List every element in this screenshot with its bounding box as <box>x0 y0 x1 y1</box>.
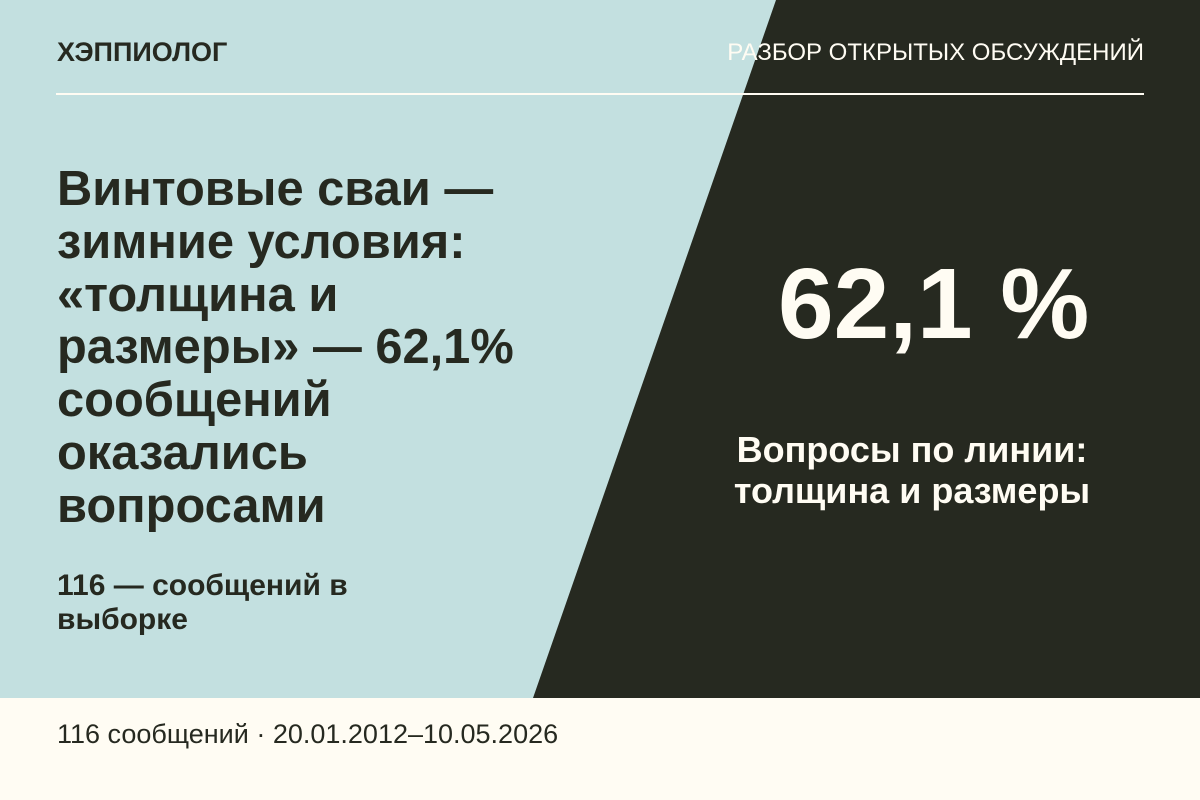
heading: зимние условия: <box>57 215 465 269</box>
heading <box>57 162 514 533</box>
stat caption: Вопросы по линии: <box>737 429 1087 470</box>
heading: размеры» — 62,1% <box>57 320 514 374</box>
big stat: 62,1 % <box>778 248 1089 360</box>
sample size note: 116 — сообщений в <box>57 569 348 602</box>
stat caption <box>734 429 1090 511</box>
sample size note: выборке <box>57 603 188 636</box>
heading: Винтовые сваи — <box>57 162 493 216</box>
brand name: ХЭППИОЛОГ <box>57 37 227 67</box>
sample size note <box>57 569 348 636</box>
heading: «толщина и <box>57 268 338 322</box>
header rule <box>56 93 1144 95</box>
stat caption: толщина и размеры <box>734 470 1090 511</box>
heading: оказались <box>57 426 308 480</box>
header label: РАЗБОР ОТКРЫТЫХ ОБСУЖДЕНИЙ <box>727 39 1144 66</box>
heading: вопросами <box>57 479 326 533</box>
footer text: 116 сообщений · 20.01.2012–10.05.2026 <box>57 719 558 749</box>
heading: сообщений <box>57 373 332 427</box>
